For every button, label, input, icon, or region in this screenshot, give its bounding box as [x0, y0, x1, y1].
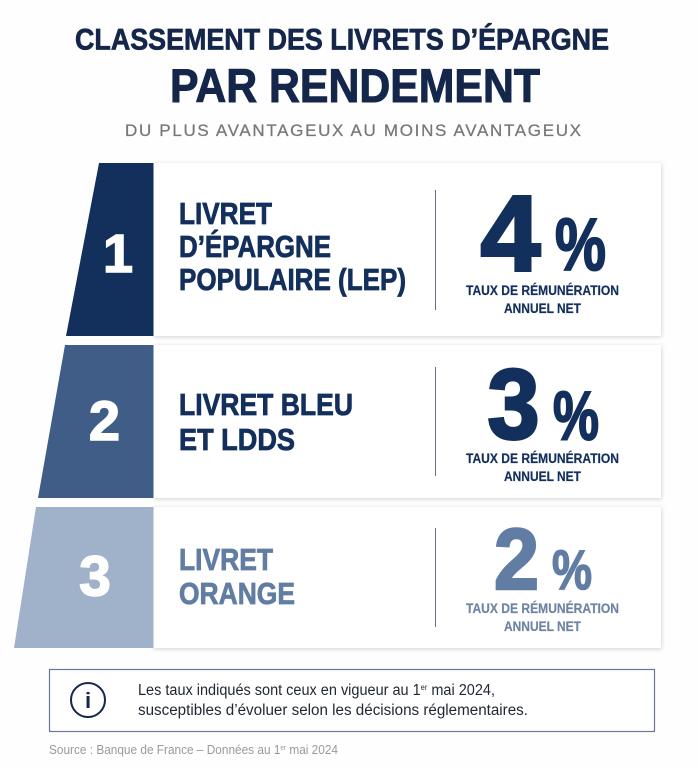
title line 2: PAR RENDEMENT — [170, 59, 540, 112]
note text: er — [421, 683, 428, 692]
source: Source : Banque de France – Données au 1 — [49, 742, 303, 757]
rate 3%: TAUX DE RÉMUNÉRATION — [466, 451, 619, 466]
product name — [179, 387, 353, 457]
product name: LIVRET BLEU — [179, 387, 353, 422]
rate 3% — [466, 348, 619, 484]
product name — [179, 196, 406, 297]
card background — [153, 345, 661, 498]
rate 4% — [466, 172, 619, 316]
subtitle: DU PLUS AVANTAGEUX AU MOINS AVANTAGEUX — [125, 121, 581, 140]
icon: info: i — [85, 688, 91, 713]
note text: mai 2024, — [427, 682, 495, 699]
note text: susceptibles d’évoluer selon les décisions réglementaires. — [138, 702, 528, 719]
card background — [153, 163, 661, 336]
icon: info — [71, 683, 105, 717]
note text — [138, 682, 528, 719]
rate 4%: 4 — [480, 172, 540, 294]
rate 2%: ANNUEL NET — [504, 619, 582, 634]
rate 2% — [466, 512, 619, 634]
callout: note — [50, 670, 654, 732]
note text: Les taux indiqués sont ceux en vigueur au 1 — [138, 682, 440, 699]
product name: LIVRET — [179, 196, 272, 231]
title line 1: CLASSEMENT DES LIVRETS D’ÉPARGNE — [75, 22, 609, 56]
rate 3%: 3 — [488, 348, 540, 460]
card background — [153, 507, 661, 648]
panel: rank 3 Livret Orange — [14, 507, 661, 648]
rate 4%: % — [555, 203, 606, 286]
product name — [179, 542, 295, 611]
product name: ORANGE — [179, 576, 295, 611]
source: mai 2024 — [286, 742, 338, 757]
product name: ET LDDS — [179, 422, 295, 457]
rate 3%: ANNUEL NET — [504, 469, 582, 484]
title — [75, 22, 609, 112]
rate 4%: TAUX DE RÉMUNÉRATION — [466, 283, 619, 298]
rate 3%: % — [553, 378, 599, 454]
rank tab 3 — [14, 507, 154, 648]
rate 4%: ANNUEL NET — [504, 301, 582, 316]
product name: LIVRET — [179, 542, 273, 577]
panel: rank 2 Livret Bleu et LDDS — [38, 345, 661, 498]
rate 2%: 2 — [494, 512, 539, 608]
product name: POPULAIRE (LEP) — [179, 262, 406, 297]
panel: rank 1 LEP — [66, 163, 661, 336]
rate 2%: TAUX DE RÉMUNÉRATION — [466, 601, 619, 616]
product name: D’ÉPARGNE — [179, 229, 331, 264]
rank number 2: 2 — [89, 389, 120, 452]
rank number 3: 3 — [79, 544, 111, 608]
rank tab 2 — [38, 345, 154, 498]
rate 2%: % — [552, 538, 592, 601]
rank number 1: 1 — [103, 224, 133, 284]
rank tab 1 — [66, 163, 154, 336]
source: er — [280, 745, 287, 752]
